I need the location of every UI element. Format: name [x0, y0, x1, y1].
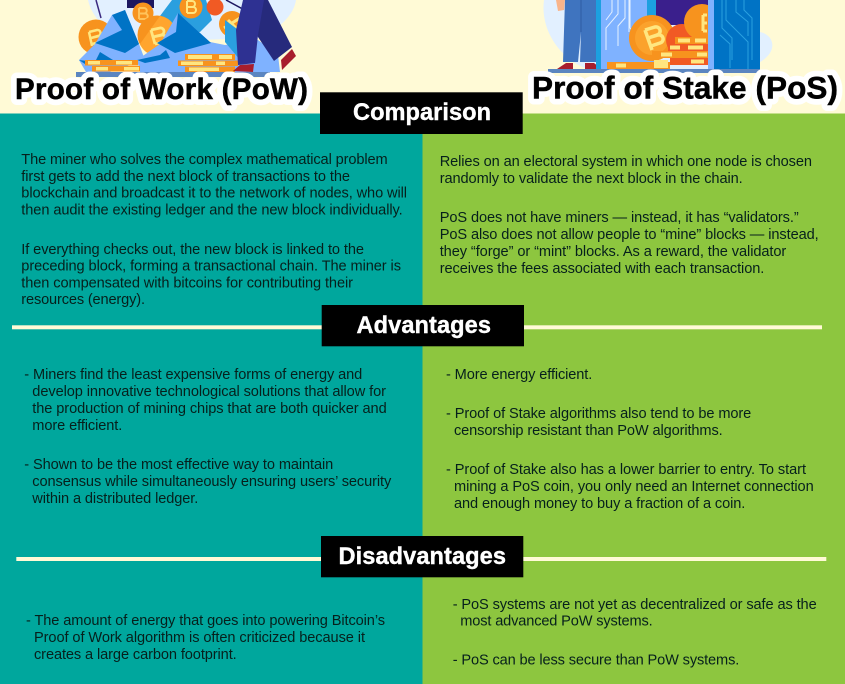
text: proof of stake advantages: - More energy efficient.: [446, 367, 592, 383]
illustration: miner with bitcoin rocks: [76, 0, 296, 77]
heading: advantages: [322, 305, 524, 346]
title: proof of stake: Proof of Stake (PoS): [532, 70, 838, 106]
heading: advantages: Advantages: [356, 313, 491, 339]
text: proof of work advantages: - Shown to be the most effective way to maintain: [24, 457, 333, 473]
text: proof of work disadvantages: [26, 613, 385, 663]
text: proof of work disadvantages: Proof of Work algorithm is often criticized because it: [34, 630, 365, 646]
heading: comparison: [320, 92, 523, 134]
text: proof of work advantages: more efficient.: [32, 418, 122, 434]
text: proof of stake comparison: PoS also does not allow people to “mine” blocks — instead,: [440, 227, 819, 243]
text: proof of work comparison: If everything checks out, the new block is linked to the: [21, 242, 364, 258]
heading: disadvantages: Disadvantages: [338, 544, 506, 570]
text: proof of work disadvantages: - The amount of energy that goes into powering Bitcoin’s: [26, 613, 385, 629]
text: proof of stake advantages: - Proof of Stake also has a lower barrier to entry. To start: [446, 462, 806, 478]
text: proof of work advantages: within a distributed ledger.: [31, 491, 198, 507]
text: proof of stake disadvantages: - PoS can be less secure than PoW systems.: [453, 652, 739, 668]
text: proof of work advantages: - Miners find the least expensive forms of energy and: [24, 367, 362, 383]
text: proof of stake disadvantages: most advanced PoW systems.: [460, 614, 653, 630]
text: proof of work comparison: then compensated with bitcoins for contributing their: [21, 276, 353, 292]
title: proof of stake: Proof of Stake (PoS): [532, 70, 838, 106]
text: proof of stake advantages: and enough money to buy a fraction of a coin.: [454, 496, 745, 512]
text: proof of work advantages: the production of mining chips that are both quicker and: [32, 401, 387, 417]
text: proof of stake disadvantages: [453, 597, 817, 668]
text: proof of stake disadvantages: - PoS systems are not yet as decentralized or safe as the: [453, 597, 817, 613]
text: proof of work comparison: blockchain and broadcast it to the network of nodes, who will: [21, 186, 407, 202]
text: proof of stake advantages: mining a PoS coin, you only need an Internet connection: [454, 479, 814, 495]
text: proof of work advantages: [24, 367, 392, 507]
text: proof of stake comparison: Relies on an electoral system in which one node is chosen: [440, 154, 812, 170]
text: proof of work comparison: first gets to add the next block of transactions to the: [21, 169, 350, 185]
text: proof of work comparison: The miner who solves the complex mathematical problem: [21, 152, 388, 168]
text: proof of work advantages: consensus while simultaneously ensuring users’ security: [32, 474, 392, 490]
title: proof of work: Proof of Work (PoW): [15, 73, 308, 106]
heading: comparison: Comparison: [353, 100, 491, 126]
text: proof of stake comparison: [440, 154, 819, 277]
text: proof of stake comparison: randomly to validate the next block in the chain.: [440, 171, 743, 187]
text: proof of stake comparison: they “forge” or “mint” blocks. As a reward, the validator: [440, 244, 786, 260]
panel: proof of stake background: [422, 114, 845, 684]
text: proof of stake comparison: receives the fees associated with each transaction.: [440, 261, 764, 277]
text: proof of stake advantages: [446, 367, 814, 512]
text: proof of work comparison: preceding block, forming a transactional chain. The miner is: [21, 258, 401, 274]
text: proof of work comparison: resources (energy).: [21, 292, 145, 308]
text: proof of stake advantages: - Proof of Stake algorithms also tend to be more: [446, 406, 751, 422]
text: proof of stake comparison: PoS does not have miners — instead, it has “validators.”: [440, 210, 799, 226]
panel: proof of work background: [0, 114, 422, 684]
text: proof of work advantages: develop innovative technological solutions that allow for: [32, 384, 386, 400]
text: proof of work comparison: [21, 152, 407, 308]
text: proof of work disadvantages: creates a large carbon footprint.: [34, 647, 237, 663]
title: proof of work: Proof of Work (PoW): [15, 73, 308, 106]
heading: disadvantages: [321, 536, 523, 577]
text: proof of work comparison: then audit the existing ledger and the new block individually.: [21, 202, 403, 218]
illustration: person with bitcoin vault: [543, 0, 772, 73]
text: proof of stake advantages: censorship resistant than PoW algorithms.: [454, 423, 723, 439]
